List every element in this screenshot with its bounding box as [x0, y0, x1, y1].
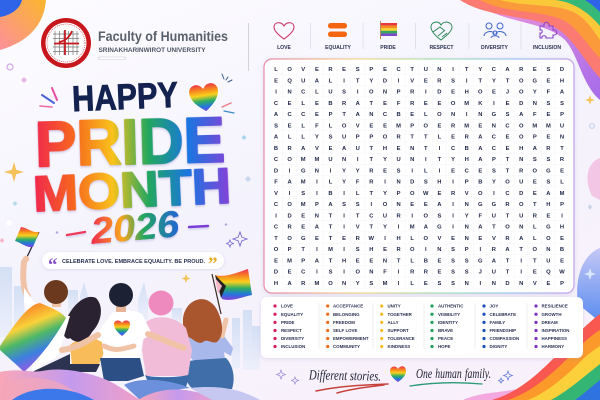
panel: word search grid: EQUALITYDIVERSITYTOGEH [274, 78, 564, 84]
panel: word search grid: CELEBRATEFREEOMKIEDNSS [274, 101, 564, 107]
word column 4 [430, 304, 464, 349]
callout: slogan pill [42, 252, 224, 276]
word column 6: INSPIRATION [542, 328, 569, 333]
dividers [311, 23, 521, 49]
word column 4: AUTHENTIC [438, 304, 464, 309]
decoration: right-side blobs [577, 95, 600, 322]
word column 6: DREAM [542, 320, 558, 325]
illustration: city skyline [0, 267, 260, 370]
word column 1: INCLUSION [281, 344, 305, 349]
panel: word search grid: DIGNIYYRESILIECESTROGE [274, 168, 564, 174]
word column 2 [326, 304, 369, 349]
panel: word search grid: COMPASSIONEEAINGGROTHP [274, 202, 564, 208]
panel: word list [261, 297, 583, 358]
word column 1: DIVERSITY [281, 336, 304, 341]
word column 5 [482, 304, 519, 349]
panel: value icons row [274, 21, 561, 51]
panel: word search grid: ALLYSUPPORTTLERACEOPEN [274, 134, 564, 140]
word column 3: TOGETHER [388, 312, 413, 317]
panel: word search grid: FAMILYFRINDSHIPBYOUESL [274, 180, 564, 186]
icon: heart on shirt [114, 320, 130, 336]
person: dark hair, yellow shirt [63, 297, 108, 372]
label: diversity: DIVERSITY [481, 45, 509, 51]
panel: word search grid: INCLUSIONPRIDEHOEJOYFA [275, 90, 565, 96]
word column 1: PRIDE [281, 320, 294, 325]
panel: word search grid: EMPATHEENTLBESSGATITUE [274, 258, 564, 264]
heading: faculty name [98, 28, 228, 60]
panel: word search grid: COMMUNITYUNITYHAPTNSSR [274, 157, 565, 163]
divider [247, 23, 250, 71]
icon: rainbow heart [188, 82, 221, 114]
label: inclusion: INCLUSION [533, 45, 561, 51]
icon: pride flag [380, 21, 397, 39]
icon: right progress pride flag [212, 269, 252, 314]
tagline: different stories: Different stories. [308, 368, 381, 385]
tagline: one human family [410, 367, 491, 386]
icon: love [274, 23, 294, 39]
word column 2: COMMUNITY [333, 344, 360, 349]
label: love: LOVE [277, 45, 292, 51]
decoration: top-left corner swirl [0, 0, 46, 83]
label: respect: RESPECT [429, 45, 454, 51]
word column 4: PEACE [438, 336, 453, 341]
tagline: one human family: One human family. [416, 367, 491, 382]
arms around shoulders [62, 334, 184, 350]
word column 5: COMPASSION [490, 336, 519, 341]
callout: slogan pill: CELEBRATE LOVE. EMBRACE EQUALITY. BE PROUD. [62, 259, 205, 265]
panel: word search grid: SELFLOVEEMPOERMENCOMMU [274, 123, 564, 129]
word column 3: UNITY [388, 304, 401, 309]
word column 2: EMPOWERMENT [333, 336, 369, 341]
word column 3: ALLY [388, 320, 399, 325]
word column 3: KINDNESS [388, 344, 410, 349]
decoration: bottom-left waves [0, 369, 260, 400]
word column 5: DIGNITY [490, 344, 507, 349]
word column 6 [534, 304, 569, 349]
word column 3: TOLERANCE [388, 336, 415, 341]
word column 1: LOVE [281, 304, 293, 309]
decoration: tagline sparkles [276, 370, 512, 384]
word column 1: RESPECT [281, 328, 302, 333]
icon: tagline heart [390, 366, 406, 382]
label: equality: EQUALITY [325, 45, 351, 51]
callout: slogan pill: “ [48, 255, 58, 276]
decoration: sparkles around title [0, 135, 251, 247]
word column 1: EQUALITY [281, 312, 303, 317]
word column 5: FAMILY [490, 320, 505, 325]
illustration: friends seen from behind [0, 262, 234, 389]
title: 2026 with dashes: 2026 [88, 203, 181, 252]
title: HAPPY: HAPPY [71, 74, 179, 119]
word column 2: SELF LOVE [333, 328, 357, 333]
word column 4: VISIBILITY [438, 312, 460, 317]
word column 4: HOPE [438, 344, 451, 349]
title: PRIDE: PRIDE [34, 104, 226, 180]
panel: word search grid: DECISIONFIRRESSJUTIEQW [274, 270, 565, 276]
panel: word search grid [264, 59, 574, 293]
icon: equality [328, 23, 347, 37]
word column 6: GROWTH [542, 312, 562, 317]
icon: respect handshake heart [431, 22, 452, 40]
person: pink hair, pink shirt [142, 290, 192, 387]
label: pride: PRIDE [380, 45, 396, 51]
icon: inclusion puzzle [540, 22, 557, 38]
heading: faculty name: Faculty of Humanities [98, 28, 228, 44]
panel: word search grid: IDENTITCURIOSIYFUTUREI [275, 213, 563, 219]
person: right, auburn hair, blue shirt [182, 299, 234, 389]
panel: word search grid: HARMONYSMILESSNINDNVEP [274, 281, 564, 287]
panel: word search grid: CREATIVTYIMAGINATONLGH [274, 224, 564, 230]
decoration: title sparks [40, 74, 234, 113]
word column 2: ACCEPTANCE [333, 304, 363, 309]
panel: word search grid: VISIBILTYPOWERVOICDEAM [274, 191, 565, 197]
word column 3 [380, 304, 415, 349]
icon: diversity people [484, 23, 506, 38]
panel: word search grid: BRAVEAUTHENTICBACEHART [274, 146, 564, 152]
word column 6: HAPPINESS [542, 336, 567, 341]
tagline: different stories [308, 368, 388, 393]
word column 5: JOY [490, 304, 498, 309]
word column 4: BRAVE [438, 328, 453, 333]
icon: left rainbow flag [15, 227, 39, 262]
logo: Srinakharinwirot University seal [41, 18, 91, 68]
word column 1 [273, 304, 305, 349]
word column 5: CELEBRATE [490, 312, 516, 317]
panel: word search grid: OPTIMISHEROINSPIRATONB [274, 247, 564, 253]
decoration: bottom-right rainbow wave [463, 314, 600, 400]
panel: word search grid: ACCEPTANCBELONINGSAFEP [274, 112, 564, 118]
word column 5: FRIENDSHIP [490, 328, 516, 333]
word column 6: HARMONY [542, 344, 564, 349]
word column 3: SUPPORT [388, 328, 409, 333]
word column 4: IDENTITY [438, 320, 458, 325]
title: MONTH: MONTH [32, 158, 232, 222]
decoration: top-right rainbow wave [460, 0, 600, 100]
word column 6: RESILIENCE [542, 304, 568, 309]
panel: word search grid: TOGETERWIHLOVENEVRALOE [274, 236, 564, 242]
panel: word search grid: LOVERESPECTUNITYCARESD [274, 67, 564, 73]
word column 2: BELONGING [333, 312, 360, 317]
person: centre, white shirt with heart [94, 283, 152, 381]
word column 2: FREEDOM [333, 320, 355, 325]
callout: slogan pill: ” [208, 254, 218, 275]
person: left, with cape and raised arm [0, 262, 70, 378]
title: 2026 with dashes [67, 203, 208, 252]
heading: faculty name: SRINAKHARINWIROT UNIVERSITY [98, 48, 206, 54]
icon: sparkle above crowd [182, 274, 190, 283]
